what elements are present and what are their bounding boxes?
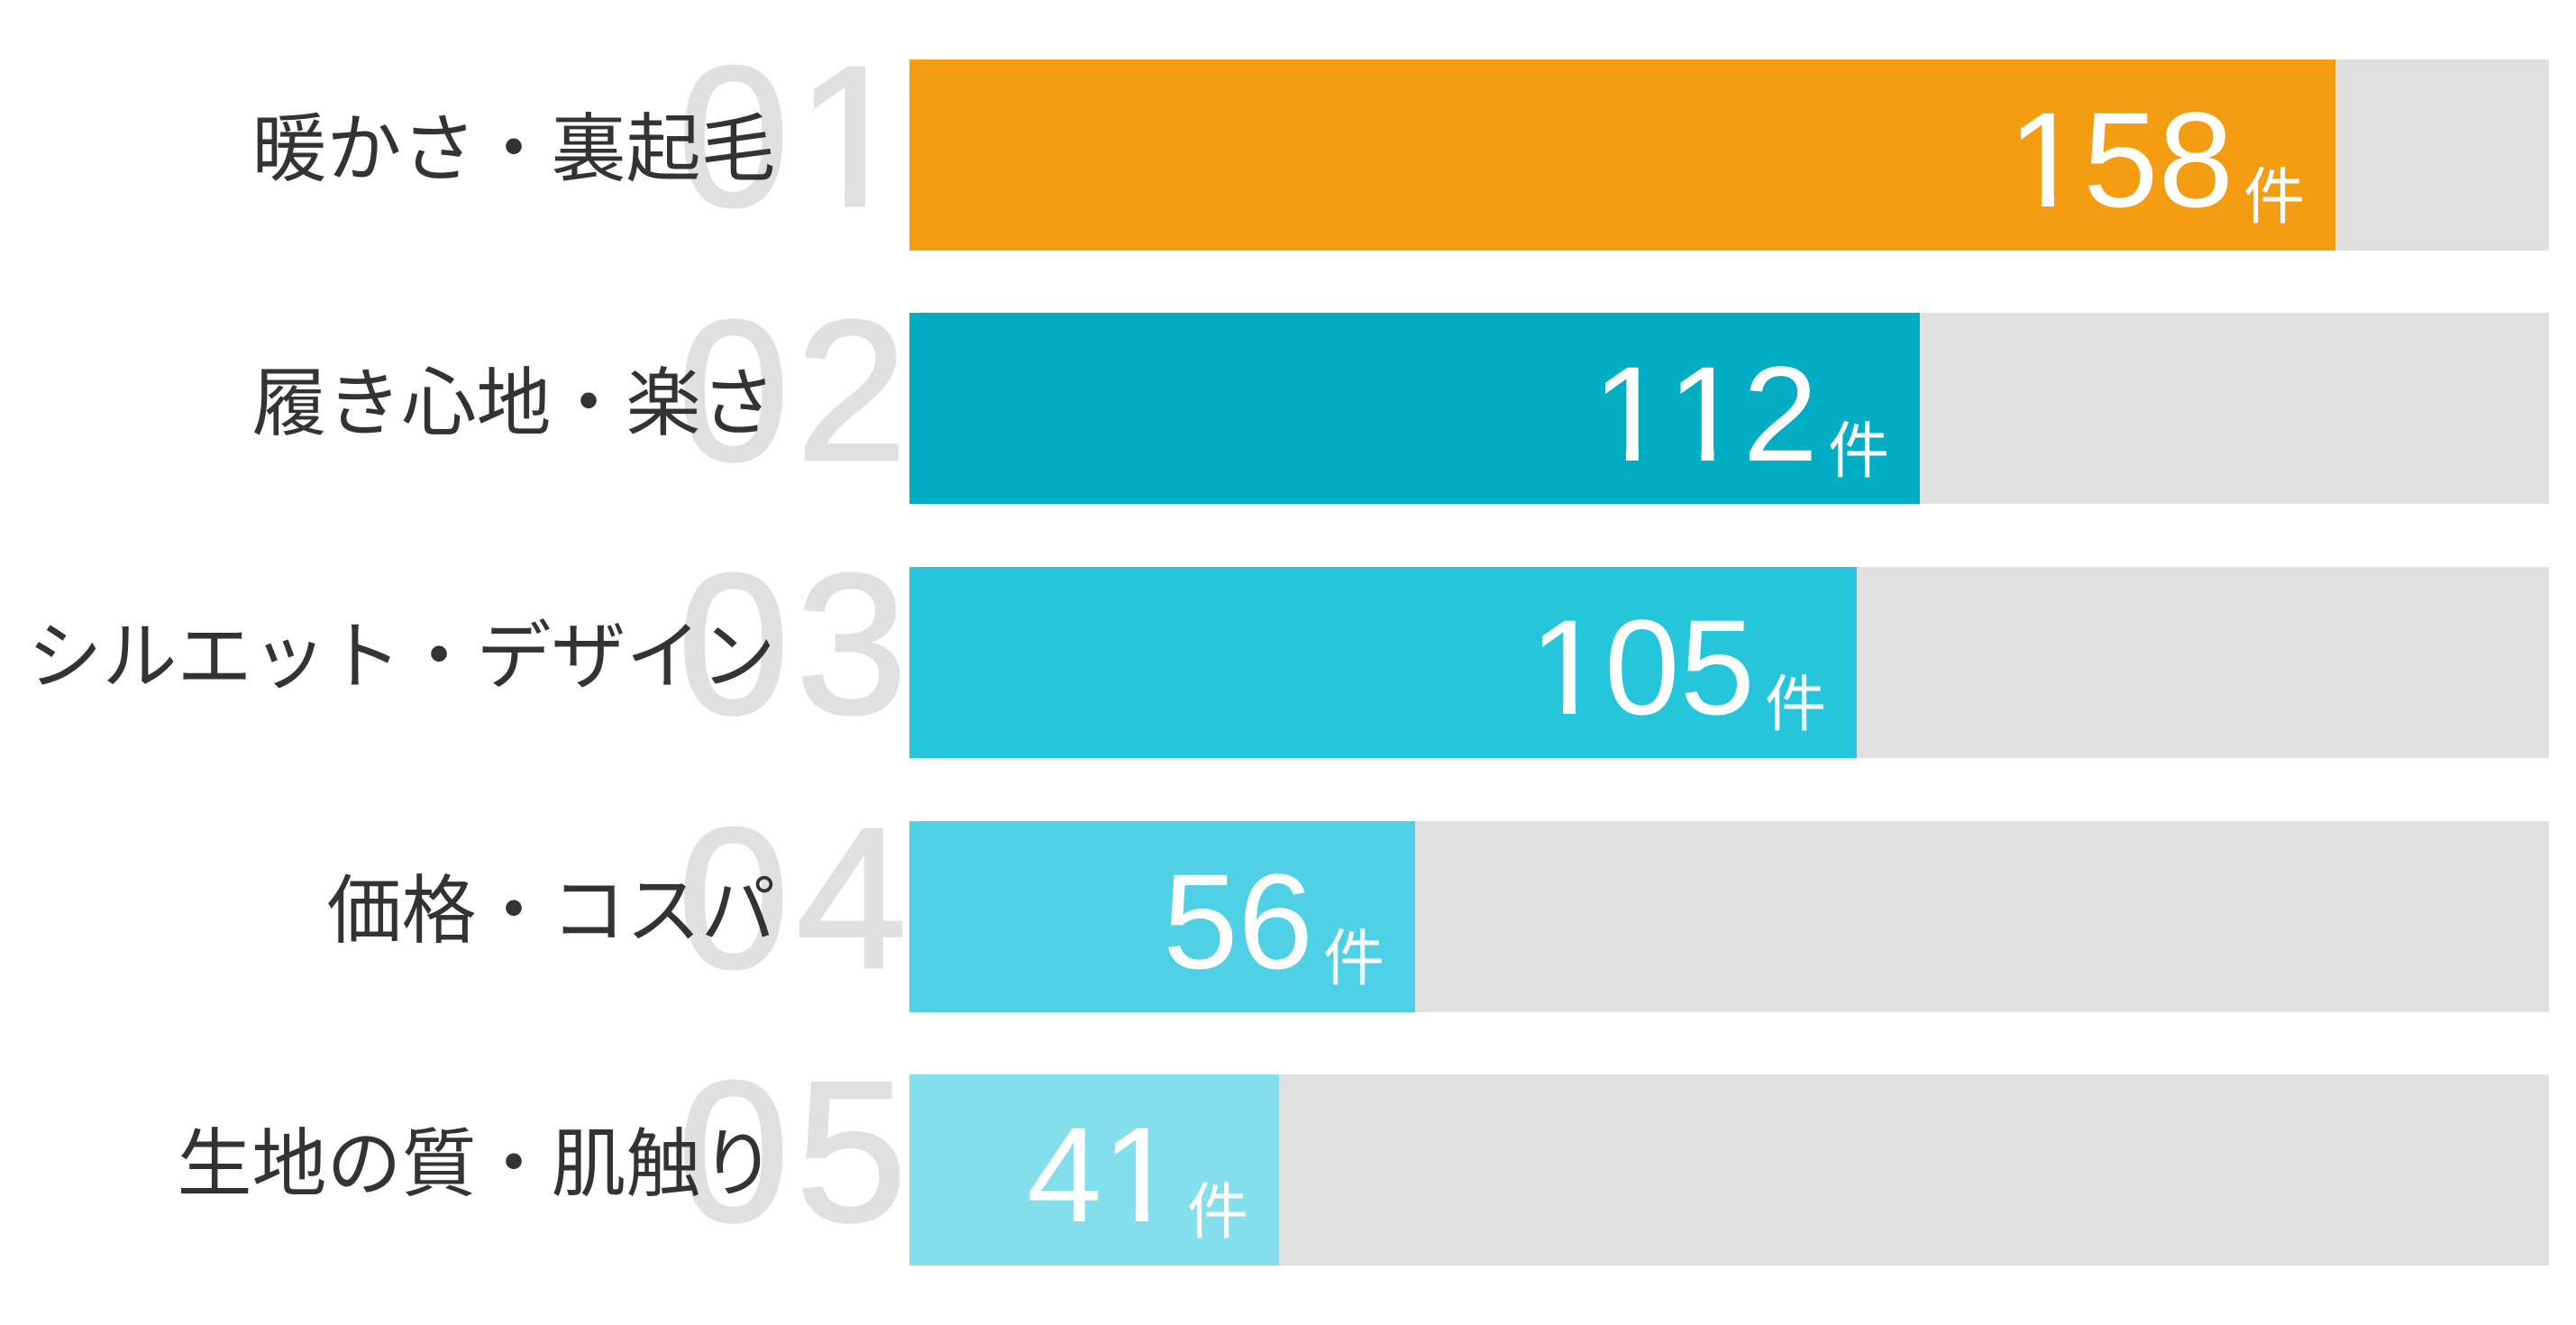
bar fill bbox=[909, 59, 2335, 251]
unit: 件 bbox=[1828, 417, 1889, 486]
bar fill bbox=[909, 567, 1857, 758]
value 41: 41 bbox=[1027, 1099, 1177, 1250]
rank number 04: 04 bbox=[678, 787, 907, 1010]
row 5: fabric quality and feel bbox=[181, 1074, 2549, 1266]
row 2: comfort bbox=[254, 313, 2549, 504]
bar fill bbox=[909, 313, 1920, 504]
bar track bbox=[909, 1074, 2549, 1266]
bar track bbox=[909, 567, 2549, 758]
bar track bbox=[909, 821, 2549, 1012]
rank number 01: 01 bbox=[678, 25, 907, 249]
label: silhouette and design: シルエット・デザイン bbox=[27, 615, 775, 699]
rank number 03: 03 bbox=[678, 533, 907, 756]
bar track bbox=[909, 59, 2549, 251]
value 56: 56 bbox=[1163, 845, 1313, 997]
value 105: 105 bbox=[1530, 591, 1755, 743]
unit: 件 bbox=[1323, 925, 1384, 993]
row 1: warmth and fleece lining bbox=[258, 59, 2549, 251]
row 3: silhouette and design bbox=[35, 567, 2549, 758]
row 4: price and value bbox=[326, 787, 2549, 1012]
unit: 件 bbox=[2243, 163, 2305, 232]
bar fill bbox=[909, 821, 1415, 1012]
value 112: 112 bbox=[1593, 338, 1818, 489]
unit: 件 bbox=[1187, 1178, 1248, 1247]
rank number 02: 02 bbox=[678, 279, 907, 503]
label: warmth: 暖かさ・裏起毛 bbox=[252, 107, 775, 191]
bar fill bbox=[909, 1074, 1279, 1266]
bar track bbox=[909, 313, 2549, 504]
value 158: 158 bbox=[2008, 84, 2233, 235]
label: fabric quality and feel: 生地の質・肌触り bbox=[177, 1122, 775, 1206]
label: price and value: 価格・コスパ bbox=[326, 869, 775, 953]
label: comfort: 履き心地・楽さ bbox=[252, 361, 775, 445]
rank number 05: 05 bbox=[678, 1040, 907, 1264]
unit: 件 bbox=[1765, 671, 1826, 739]
